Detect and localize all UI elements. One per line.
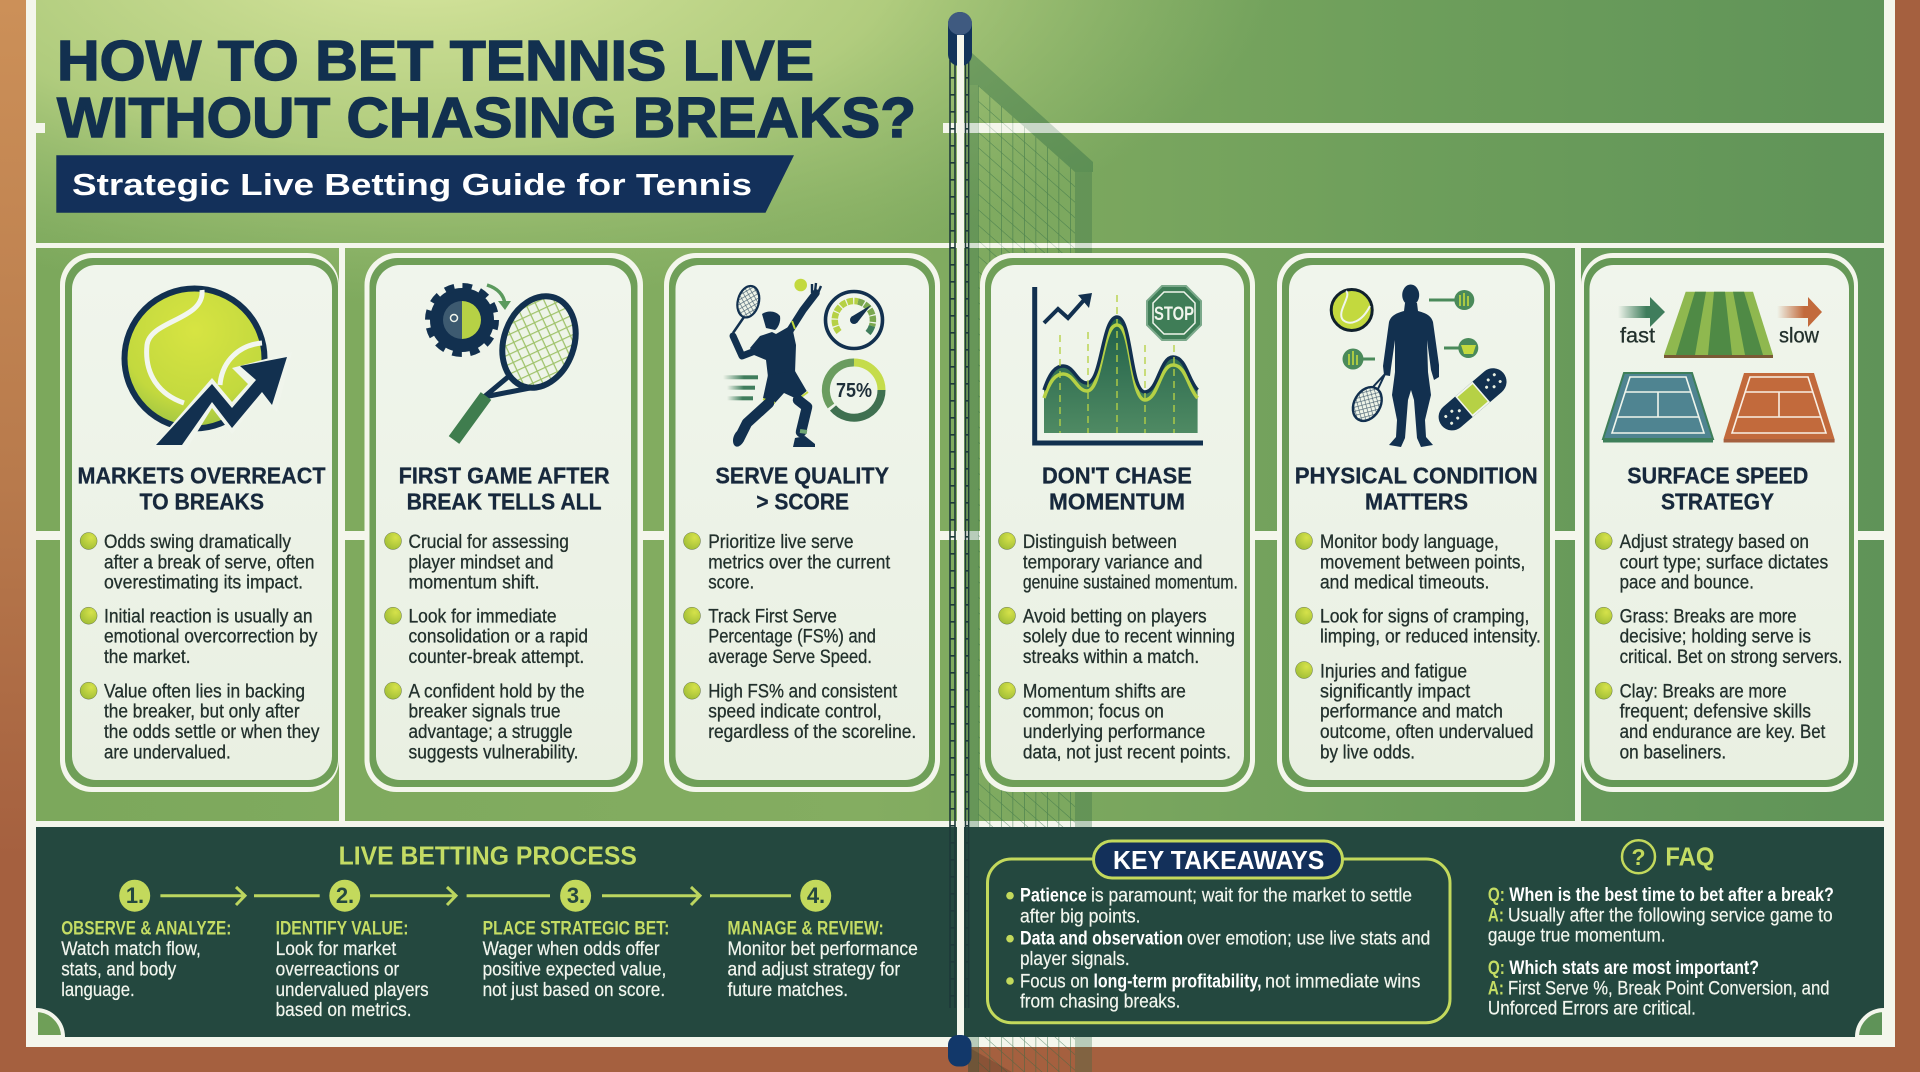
bullets: genuine sustained momentum.	[1023, 571, 1238, 593]
icon: tennis ball with rising arrow	[124, 288, 292, 450]
process arrows	[160, 887, 791, 905]
heading	[1627, 462, 1808, 514]
bullets: Look for signs of cramping,	[1320, 606, 1529, 628]
net shadow	[964, 53, 1093, 1072]
bullets: A confident hold by the	[408, 680, 585, 702]
panel: don't chase momentum	[980, 253, 1255, 792]
bullets: Initial reaction is usually an	[104, 606, 313, 628]
icon: court surfaces fast and slow: slow	[1779, 325, 1820, 348]
step 3: Wager when odds offer	[483, 938, 660, 960]
bullets: average Serve Speed.	[708, 646, 872, 668]
takeaway bullets: Focus on	[1020, 970, 1089, 992]
key takeaways pill: KEY TAKEAWAYS	[1113, 845, 1324, 875]
corner arcs	[36, 1010, 1884, 1037]
FAQ heading with question icon	[1622, 840, 1714, 873]
bullets: regardless of the scoreline.	[708, 721, 916, 743]
bullets: metrics over the current	[708, 551, 891, 573]
key takeaways box	[988, 841, 1450, 1023]
bullets: frequent; defensive skills	[1620, 701, 1811, 723]
FAQ heading with question icon: FAQ	[1665, 842, 1714, 872]
bullets: underlying performance	[1023, 721, 1205, 743]
step 1: OBSERVE & ANALYZE:	[61, 918, 231, 939]
step 3: positive expected value,	[483, 959, 666, 981]
bullets: and endurance are key. Bet	[1620, 721, 1826, 743]
heading: MATTERS	[1365, 488, 1468, 514]
center net post	[948, 12, 972, 1066]
takeaway bullets: after big points.	[1020, 905, 1141, 927]
icon: court surfaces fast and slow	[1603, 292, 1835, 442]
step 2: overreactions or	[276, 959, 400, 981]
bullets	[384, 531, 588, 763]
title: WITHOUT CHASING BREAKS?	[57, 86, 916, 150]
icon: athlete body with ball, racket and bandage	[1331, 284, 1512, 447]
subtitle banner: Strategic Live Betting Guide for Tennis	[72, 167, 752, 202]
icon: momentum chart with stop sign: STOP	[1154, 304, 1194, 325]
bullets	[1296, 531, 1541, 763]
question 2: Which stats are most important?	[1509, 957, 1759, 979]
panel: bottom dark band	[36, 827, 1884, 1037]
bullets: and medical timeouts.	[1320, 571, 1489, 593]
step 4	[728, 918, 918, 1001]
bullets: the market.	[104, 646, 190, 668]
question 2	[1488, 957, 1830, 1019]
icon: gear and racket	[429, 285, 588, 440]
bullets: High FS% and consistent	[708, 680, 898, 702]
bullets	[998, 531, 1238, 763]
bullets: speed indicate control,	[708, 701, 882, 723]
bullets: movement between points,	[1320, 551, 1525, 573]
bullets: performance and match	[1320, 701, 1503, 723]
bullets: are undervalued.	[104, 741, 231, 763]
bullets: by live odds.	[1320, 741, 1415, 763]
heading	[78, 462, 326, 514]
bullets: Momentum shifts are	[1023, 680, 1186, 702]
bullets: Value often lies in backing	[104, 680, 305, 702]
question 2: First Serve %, Break Point Conversion, and	[1508, 977, 1830, 999]
step 2: Look for market	[276, 938, 397, 960]
step 4: and adjust strategy for	[728, 959, 901, 981]
step 3	[483, 918, 669, 1001]
question 2: Unforced Errors are critical.	[1488, 997, 1696, 1019]
step 2	[276, 918, 429, 1021]
takeaway bullets: over emotion; use live stats and	[1187, 927, 1430, 949]
step numbers: 3.	[567, 883, 585, 908]
bullets	[80, 531, 320, 763]
bullets	[1595, 531, 1842, 763]
step 2: IDENTIFY VALUE:	[276, 918, 408, 939]
bullets: Clay: Breaks are more	[1620, 680, 1787, 702]
step numbers: 4.	[807, 883, 825, 908]
icon: server with gauge and 75% ring: 75%	[836, 380, 872, 402]
step 3: PLACE STRATEGIC BET:	[483, 918, 669, 939]
step 1	[61, 918, 231, 1001]
icon: court surfaces fast and slow: fast	[1620, 325, 1655, 348]
bullets: Prioritize live serve	[708, 531, 854, 553]
heading: SURFACE SPEED	[1627, 462, 1808, 488]
bullets: Track First Serve	[708, 606, 837, 628]
bullets: Crucial for assessing	[408, 531, 569, 553]
bullets: on baseliners.	[1620, 741, 1726, 763]
heading	[716, 462, 889, 514]
takeaway bullets: player signals.	[1020, 948, 1130, 970]
heading: BREAK TELLS ALL	[407, 488, 602, 514]
bullets: solely due to recent winning	[1023, 626, 1235, 648]
bullets: Percentage (FS%) and	[708, 626, 876, 648]
FAQ section	[1488, 840, 1834, 1019]
panel: surface speed	[1581, 253, 1858, 792]
bullets: critical. Bet on strong servers.	[1620, 646, 1842, 668]
step 4: Monitor bet performance	[728, 938, 918, 960]
question 1: Q:	[1488, 885, 1505, 906]
bullets: decisive; holding serve is	[1620, 626, 1811, 648]
heading: TO BREAKS	[140, 488, 264, 514]
bullets: counter-break attempt.	[408, 646, 584, 668]
takeaway bullets: Patience	[1020, 885, 1087, 907]
bullets: consolidation or a rapid	[408, 626, 588, 648]
bullets: score.	[708, 571, 754, 593]
bullets: advantage; a struggle	[408, 721, 573, 743]
step numbers	[119, 880, 831, 912]
step numbers: 1.	[126, 883, 144, 908]
step 4: future matches.	[728, 979, 848, 1001]
heading: SERVE QUALITY	[716, 462, 889, 488]
step 1: stats, and body	[61, 959, 176, 981]
heading: DON'T CHASE	[1042, 462, 1192, 488]
panel: physical condition	[1277, 253, 1555, 792]
FAQ heading with question icon: ?	[1631, 844, 1646, 870]
bullets: Monitor body language,	[1320, 531, 1499, 553]
question 2: A:	[1488, 978, 1504, 999]
bullets	[684, 531, 916, 743]
bullets: Look for immediate	[408, 606, 557, 628]
bullets: significantly impact	[1320, 680, 1471, 702]
bullets: data, not just recent points.	[1023, 741, 1231, 763]
bullets: momentum shift.	[408, 571, 540, 593]
question 1: When is the best time to bet after a break?	[1509, 884, 1834, 906]
step 3: not just based on score.	[483, 979, 665, 1001]
question 1	[1488, 884, 1834, 947]
step 2: based on metrics.	[276, 999, 412, 1021]
takeaway bullets	[1006, 885, 1430, 1013]
takeaway bullets: is paramount; wait for the market to settle	[1091, 885, 1412, 907]
bullets: common; focus on	[1023, 701, 1164, 723]
bullets: limping, or reduced intensity.	[1320, 626, 1541, 648]
icon: momentum chart with stop sign	[1035, 286, 1203, 443]
heading: MARKETS OVERREACT	[78, 462, 326, 488]
bullets: pace and bounce.	[1620, 571, 1754, 593]
bullets: Odds swing dramatically	[104, 531, 291, 553]
heading: MOMENTUM	[1049, 488, 1185, 514]
step 2: undervalued players	[276, 979, 429, 1001]
heading: PHYSICAL CONDITION	[1295, 462, 1538, 488]
heading: FIRST GAME AFTER	[399, 462, 610, 488]
bullets: overestimating its impact.	[104, 571, 303, 593]
panel: first game after break	[364, 253, 643, 792]
icon: server with gauge and 75% ring	[723, 279, 882, 448]
bullets: Avoid betting on players	[1023, 606, 1207, 628]
takeaway bullets: long-term profitability,	[1094, 970, 1262, 992]
bullets: after a break of serve, often	[104, 551, 314, 573]
takeaway bullets: not immediate wins	[1265, 970, 1421, 992]
bullets: Distinguish between	[1023, 531, 1177, 553]
bullets: Grass: Breaks are more	[1620, 606, 1797, 628]
question 1: A:	[1488, 906, 1504, 927]
step 1: language.	[61, 979, 135, 1001]
subtitle banner	[56, 155, 794, 213]
question 1: gauge true momentum.	[1488, 925, 1666, 947]
step 4: MANAGE & REVIEW:	[728, 918, 884, 939]
bullets: temporary variance and	[1023, 551, 1202, 573]
panel: serve quality	[664, 253, 940, 792]
panel: markets overreact	[60, 253, 339, 792]
heading: > SCORE	[756, 488, 849, 514]
bullets: emotional overcorrection by	[104, 626, 318, 648]
bullets: player mindset and	[408, 551, 554, 573]
bullets: the odds settle or when they	[104, 721, 320, 743]
title: HOW TO BET TENNIS LIVE	[57, 29, 814, 93]
step 1: Watch match flow,	[61, 938, 201, 960]
heading: STRATEGY	[1661, 488, 1774, 514]
heading	[399, 462, 610, 514]
question 2: Q:	[1488, 958, 1505, 979]
bullets: suggests vulnerability.	[408, 741, 578, 763]
bullets: breaker signals true	[408, 701, 561, 723]
title	[57, 29, 916, 150]
bullets: streaks within a match.	[1023, 646, 1199, 668]
step numbers: 2.	[336, 883, 354, 908]
heading	[1295, 462, 1538, 514]
bullets: the breaker, but only after	[104, 701, 300, 723]
takeaway bullets: from chasing breaks.	[1020, 991, 1180, 1013]
bullets: Injuries and fatigue	[1320, 660, 1467, 682]
takeaway bullets: Data and observation	[1020, 927, 1183, 949]
bullets: court type; surface dictates	[1620, 551, 1828, 573]
process heading: LIVE BETTING PROCESS	[339, 842, 637, 870]
question 1: Usually after the following service game to	[1508, 905, 1833, 927]
heading	[1042, 462, 1192, 514]
bullets: outcome, often undervalued	[1320, 721, 1534, 743]
process section	[61, 842, 918, 1021]
bullets: Adjust strategy based on	[1620, 531, 1809, 553]
